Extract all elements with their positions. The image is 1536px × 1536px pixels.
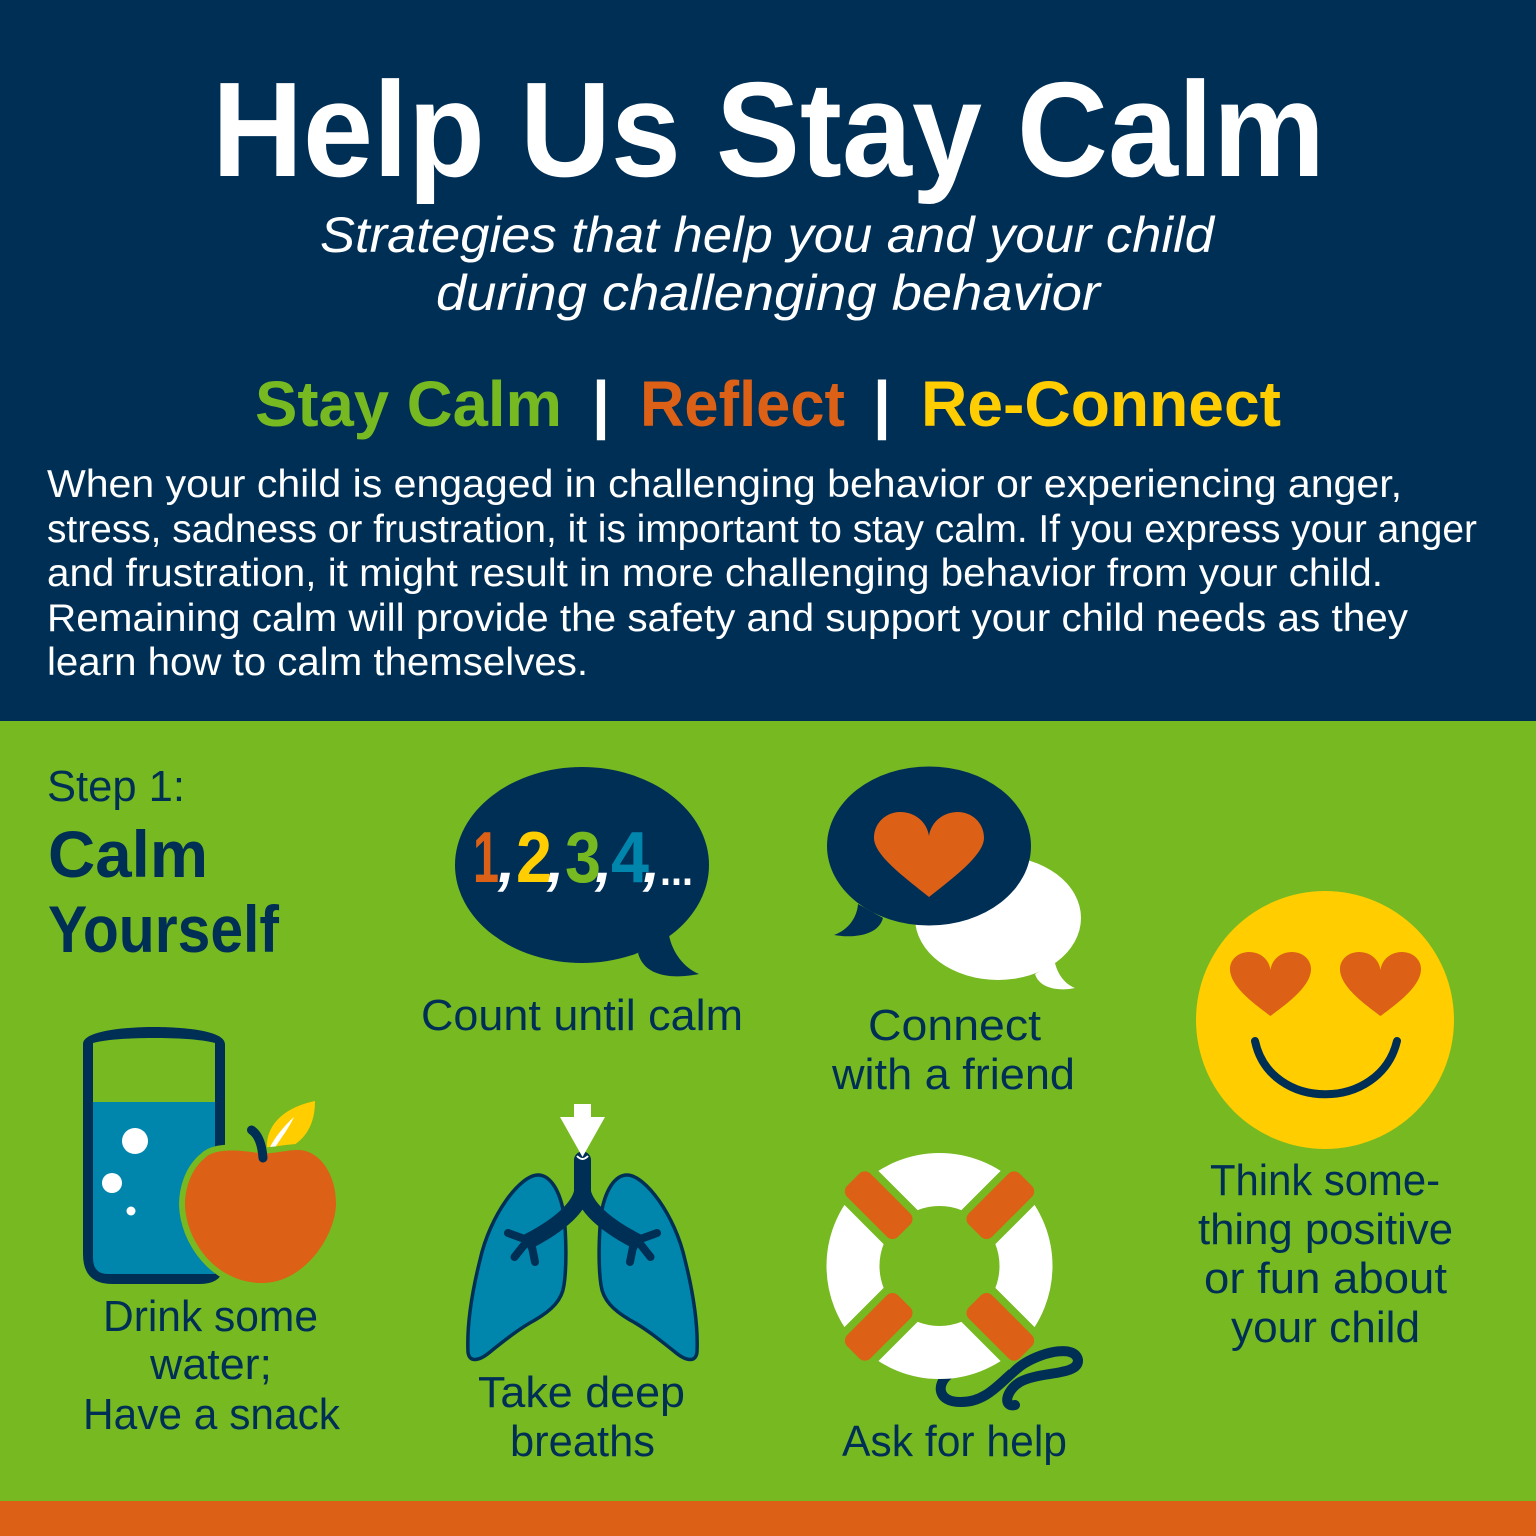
caption: take deep breaths: breaths [510,1417,655,1466]
caption: think something positive [1198,1156,1453,1352]
caption: drink water, have a snack: Have a snack [83,1390,341,1439]
footer bar [0,1501,1536,1536]
tagline: Reflect [640,368,845,440]
step label: Step 1: [47,762,185,811]
panel: step 1 [0,721,1536,1501]
tagline: | [592,368,610,441]
intro paragraph: Remaining calm will provide the safety and support your child needs as they [47,597,1409,640]
title: Help Us Stay Calm [212,54,1325,205]
caption: think something positive: your child [1231,1303,1420,1352]
step heading: Calm [48,817,208,891]
intro paragraph: stress, sadness or frustration, it is important to stay calm. If you express your anger [47,508,1477,551]
caption: drink water, have a snack [83,1292,341,1439]
icon: counting speech bubble: 1 [473,818,499,898]
step heading: Yourself [48,892,280,966]
caption: think something positive: Think some- [1210,1156,1440,1205]
intro paragraph: When your child is engaged in challenging behavior or experiencing anger, [47,463,1402,506]
caption: connect with a friend: with a friend [831,1050,1075,1099]
caption: connect with a friend: Connect [868,1001,1041,1050]
caption: drink water, have a snack: Drink some [103,1292,318,1341]
tagline: Re-Connect [921,368,1281,440]
icon: counting speech bubble: ... [660,846,693,895]
intro paragraph: and frustration, it might result in more challenging behavior from your child. [47,552,1383,595]
intro paragraph: learn how to calm themselves. [47,641,588,684]
icon: water glass and apple [83,1027,336,1284]
subtitle: during challenging behavior [436,265,1103,321]
caption: think something positive: thing positive [1198,1205,1453,1254]
subtitle [320,207,1216,321]
caption: drink water, have a snack: water; [149,1340,272,1389]
step heading [48,817,280,966]
icon: counting speech bubble: 3 [565,818,601,898]
tagline: | [873,368,891,441]
caption: take deep breaths [478,1368,685,1466]
icon: life ring with rope [766,1093,1113,1439]
caption: count until calm: Count until calm [421,991,743,1040]
tagline [255,368,1281,441]
intro paragraph [47,463,1477,684]
icon: friends speech bubbles [827,766,1081,989]
caption: take deep breaths: Take deep [478,1368,685,1417]
icon: counting speech bubble: , [546,827,564,896]
icon: counting speech bubble: , [642,827,660,896]
icon: smiley with heart eyes [1196,891,1454,1149]
tagline: Stay Calm [255,368,562,440]
icon: lungs [468,1104,697,1360]
caption: think something positive: or fun about [1204,1254,1447,1303]
panel: header [0,0,1536,721]
icon: counting speech bubble: 2 [516,818,552,898]
icon: counting speech bubble: 4 [611,818,649,898]
caption: connect with a friend [831,1001,1075,1099]
icon: counting speech bubble: , [497,827,515,896]
icon: counting speech bubble [455,767,709,976]
caption: ask for help: Ask for help [842,1417,1067,1466]
icon: counting speech bubble: , [594,827,612,896]
subtitle: Strategies that help you and your child [320,207,1216,263]
